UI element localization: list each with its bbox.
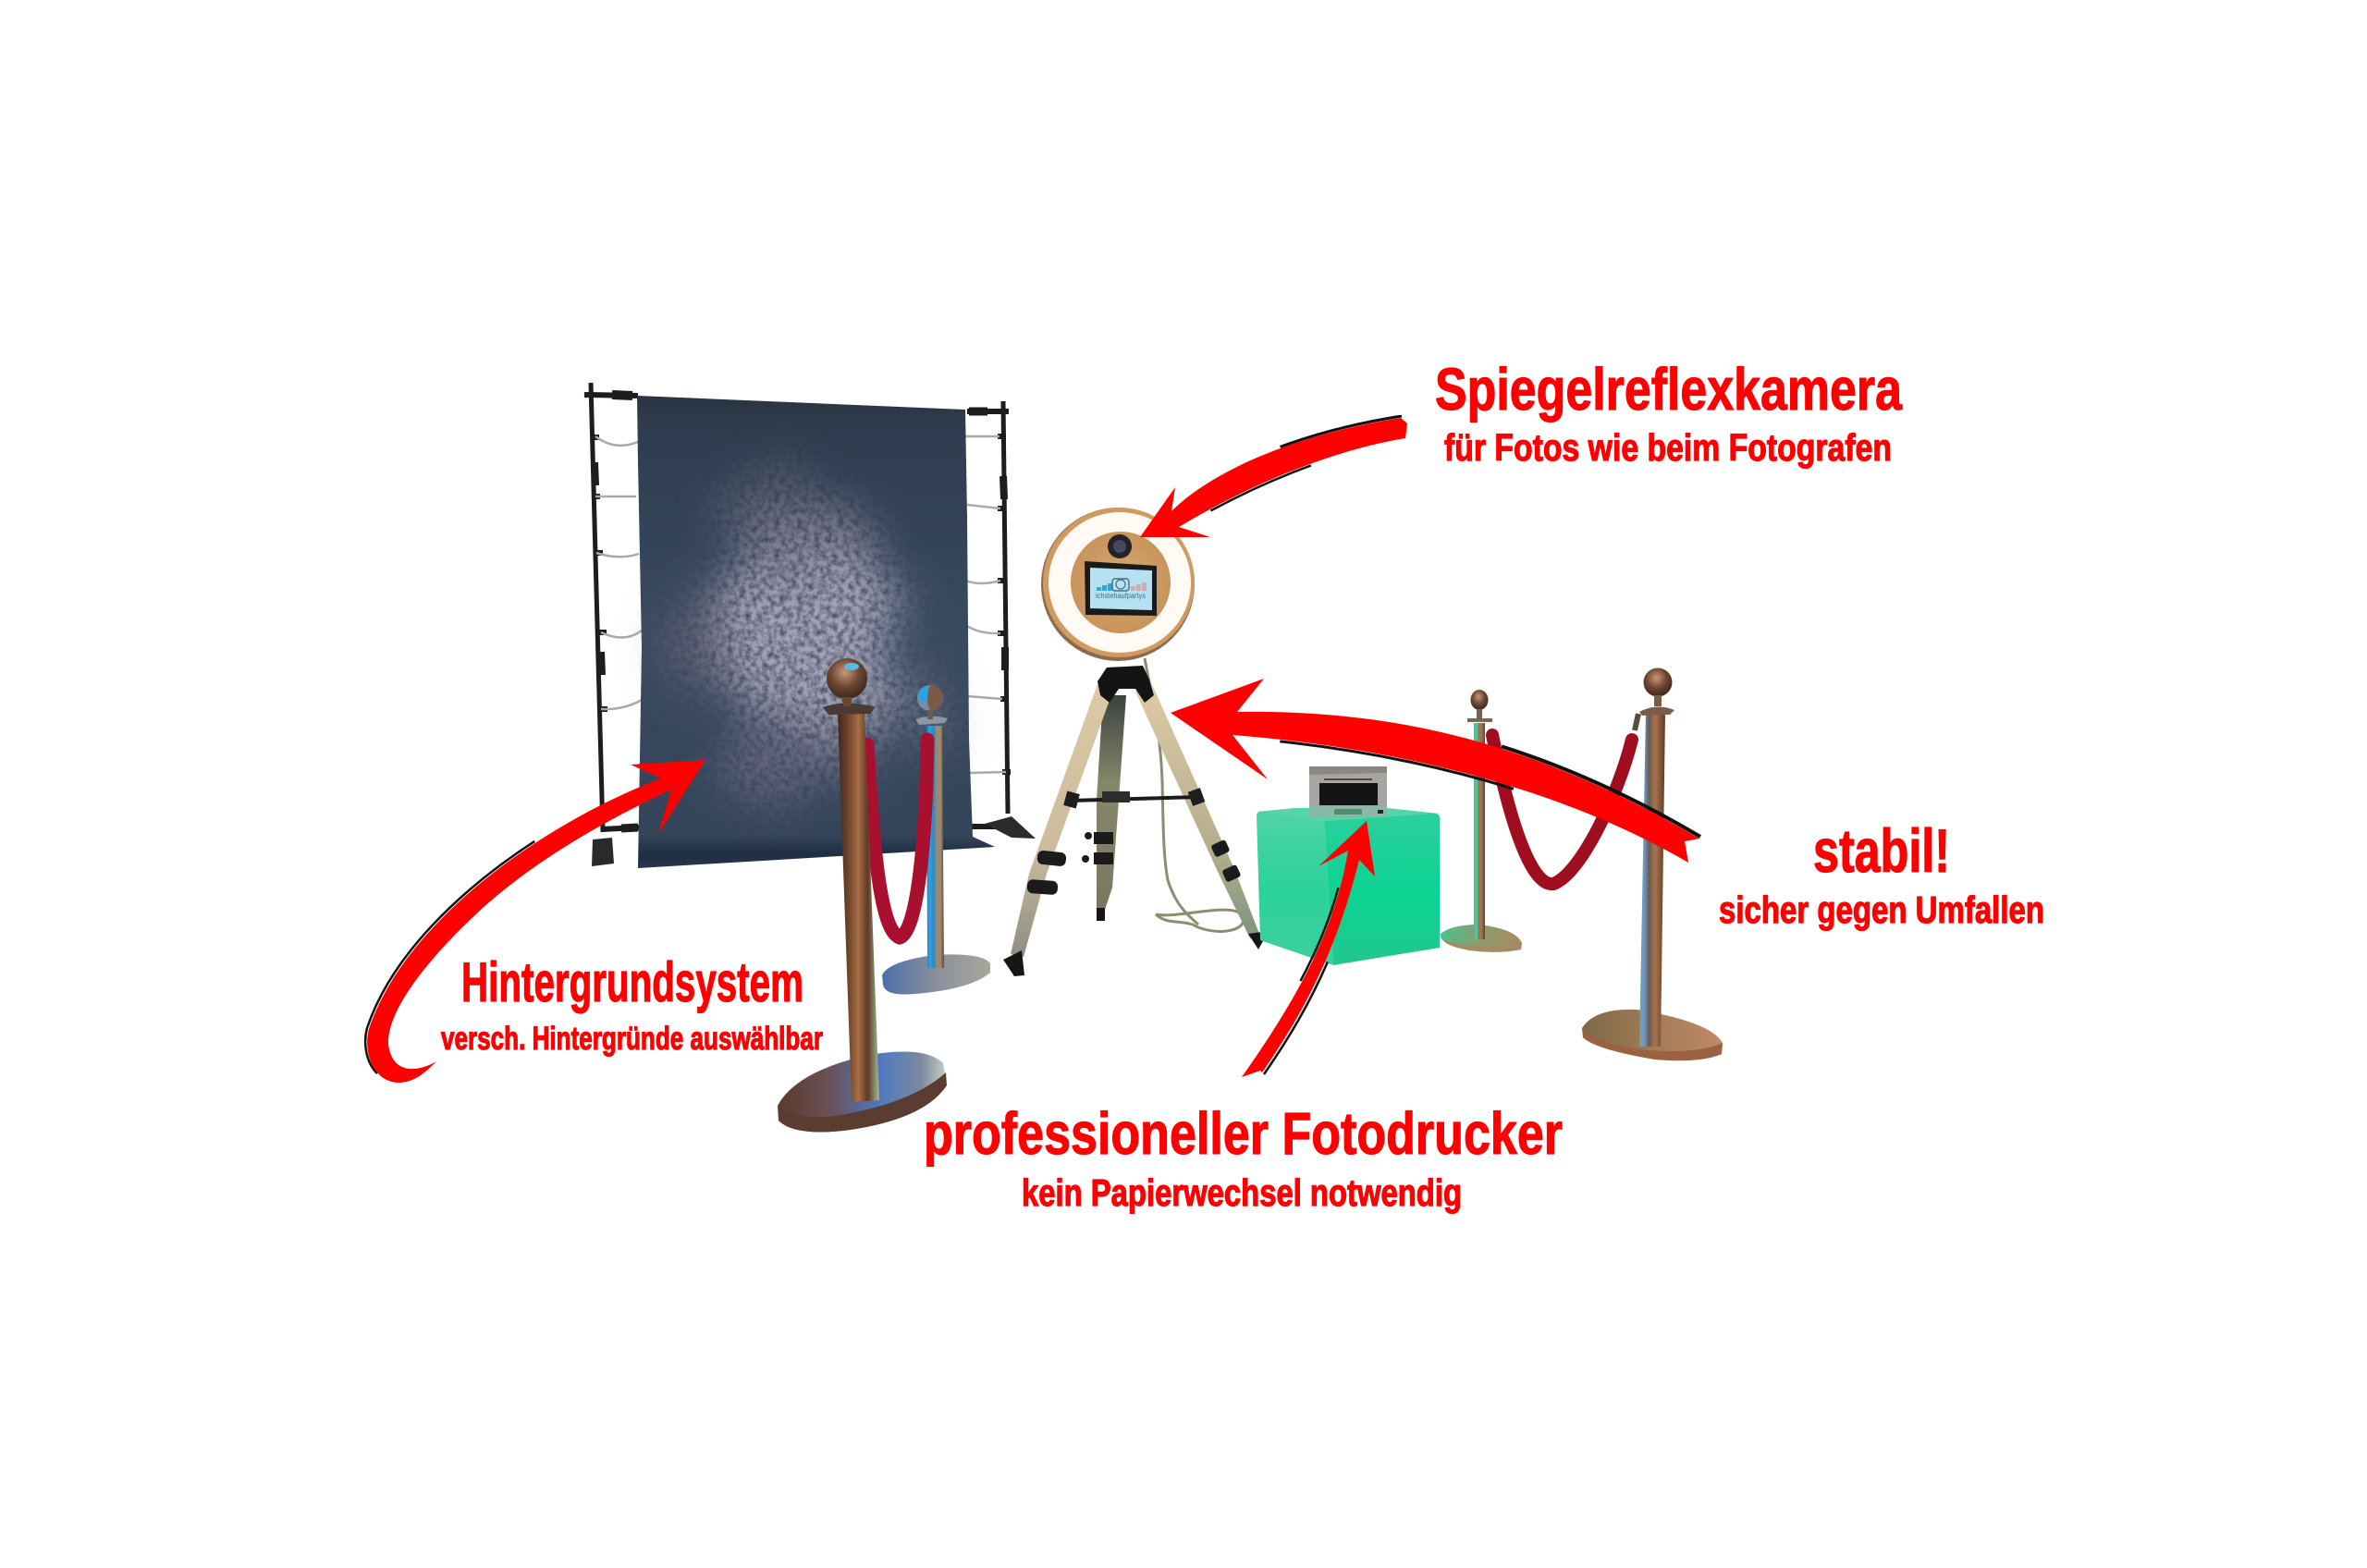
label: Hintergrundsystem <box>441 951 823 1057</box>
subheading: kein Papierwechsel notwendig <box>1022 1171 1462 1214</box>
right frame pole <box>967 401 1013 827</box>
light ring <box>1049 512 1191 653</box>
left frame pole <box>584 383 640 832</box>
ball <box>1644 668 1672 697</box>
base <box>778 1052 947 1132</box>
right leg <box>1135 682 1259 938</box>
wood panel <box>1071 532 1171 633</box>
stanchion: back right <box>1441 690 1522 952</box>
screen logo: ichstehaufpartys <box>1096 592 1146 600</box>
LED cube <box>1257 766 1440 965</box>
pole <box>926 726 944 968</box>
center leg <box>1097 695 1126 915</box>
heading: Hintergrundsystem <box>461 951 803 1013</box>
heading: Spiegelreflexkamera <box>1435 356 1902 423</box>
left leg <box>1011 684 1111 957</box>
pole <box>1474 723 1485 939</box>
right frame foot <box>985 816 1036 839</box>
panel: background system <box>584 383 1036 868</box>
stanchion: front left <box>778 658 947 1132</box>
arrow: printer <box>1240 821 1375 1077</box>
pole <box>1639 712 1665 1047</box>
lens <box>1108 534 1132 558</box>
collar <box>1467 718 1492 722</box>
stanchion: front right <box>1492 668 1723 1060</box>
rope hook <box>1635 714 1638 730</box>
ring housing <box>1041 508 1195 661</box>
lashings <box>595 436 1006 773</box>
subheading: für Fotos wie beim Fotografen <box>1444 426 1892 469</box>
photo booth with tripod <box>1003 508 1269 976</box>
tripod head <box>1098 666 1154 703</box>
stanchion: back left with rope <box>882 685 990 995</box>
subheading: sicher gegen Umfallen <box>1719 888 2044 931</box>
leg clamps <box>1026 832 1242 895</box>
cable <box>1145 658 1244 931</box>
subheading: versch. Hintergründe auswählbar <box>441 1021 823 1057</box>
backdrop cloth <box>637 396 995 868</box>
touchscreen <box>1085 561 1157 616</box>
heading: stabil! <box>1813 816 1950 885</box>
rope A-B <box>867 740 927 937</box>
ball <box>1470 690 1489 710</box>
base <box>882 954 990 995</box>
backdrop mottled cloud <box>668 472 952 800</box>
tripod feet <box>1003 908 1269 976</box>
arrow: tripod stability <box>1171 679 1700 864</box>
arrow: background <box>365 760 705 1083</box>
tripod cross brace <box>1063 788 1205 809</box>
arrow: camera <box>1140 416 1407 537</box>
collar <box>915 717 948 725</box>
label: Fotodrucker <box>924 1100 1563 1214</box>
collar <box>1639 706 1674 716</box>
label: Spiegelreflexkamera <box>1435 356 1902 469</box>
left frame foot <box>592 838 614 866</box>
velvet rope <box>1492 735 1632 884</box>
label: stabil <box>1719 816 2044 931</box>
ball <box>827 658 867 699</box>
base <box>1441 925 1522 952</box>
heading: professioneller Fotodrucker <box>924 1100 1563 1167</box>
pole <box>838 712 879 1102</box>
photo printer <box>1309 766 1387 817</box>
collar <box>823 703 875 715</box>
base <box>1582 1010 1723 1060</box>
ball <box>917 685 943 711</box>
